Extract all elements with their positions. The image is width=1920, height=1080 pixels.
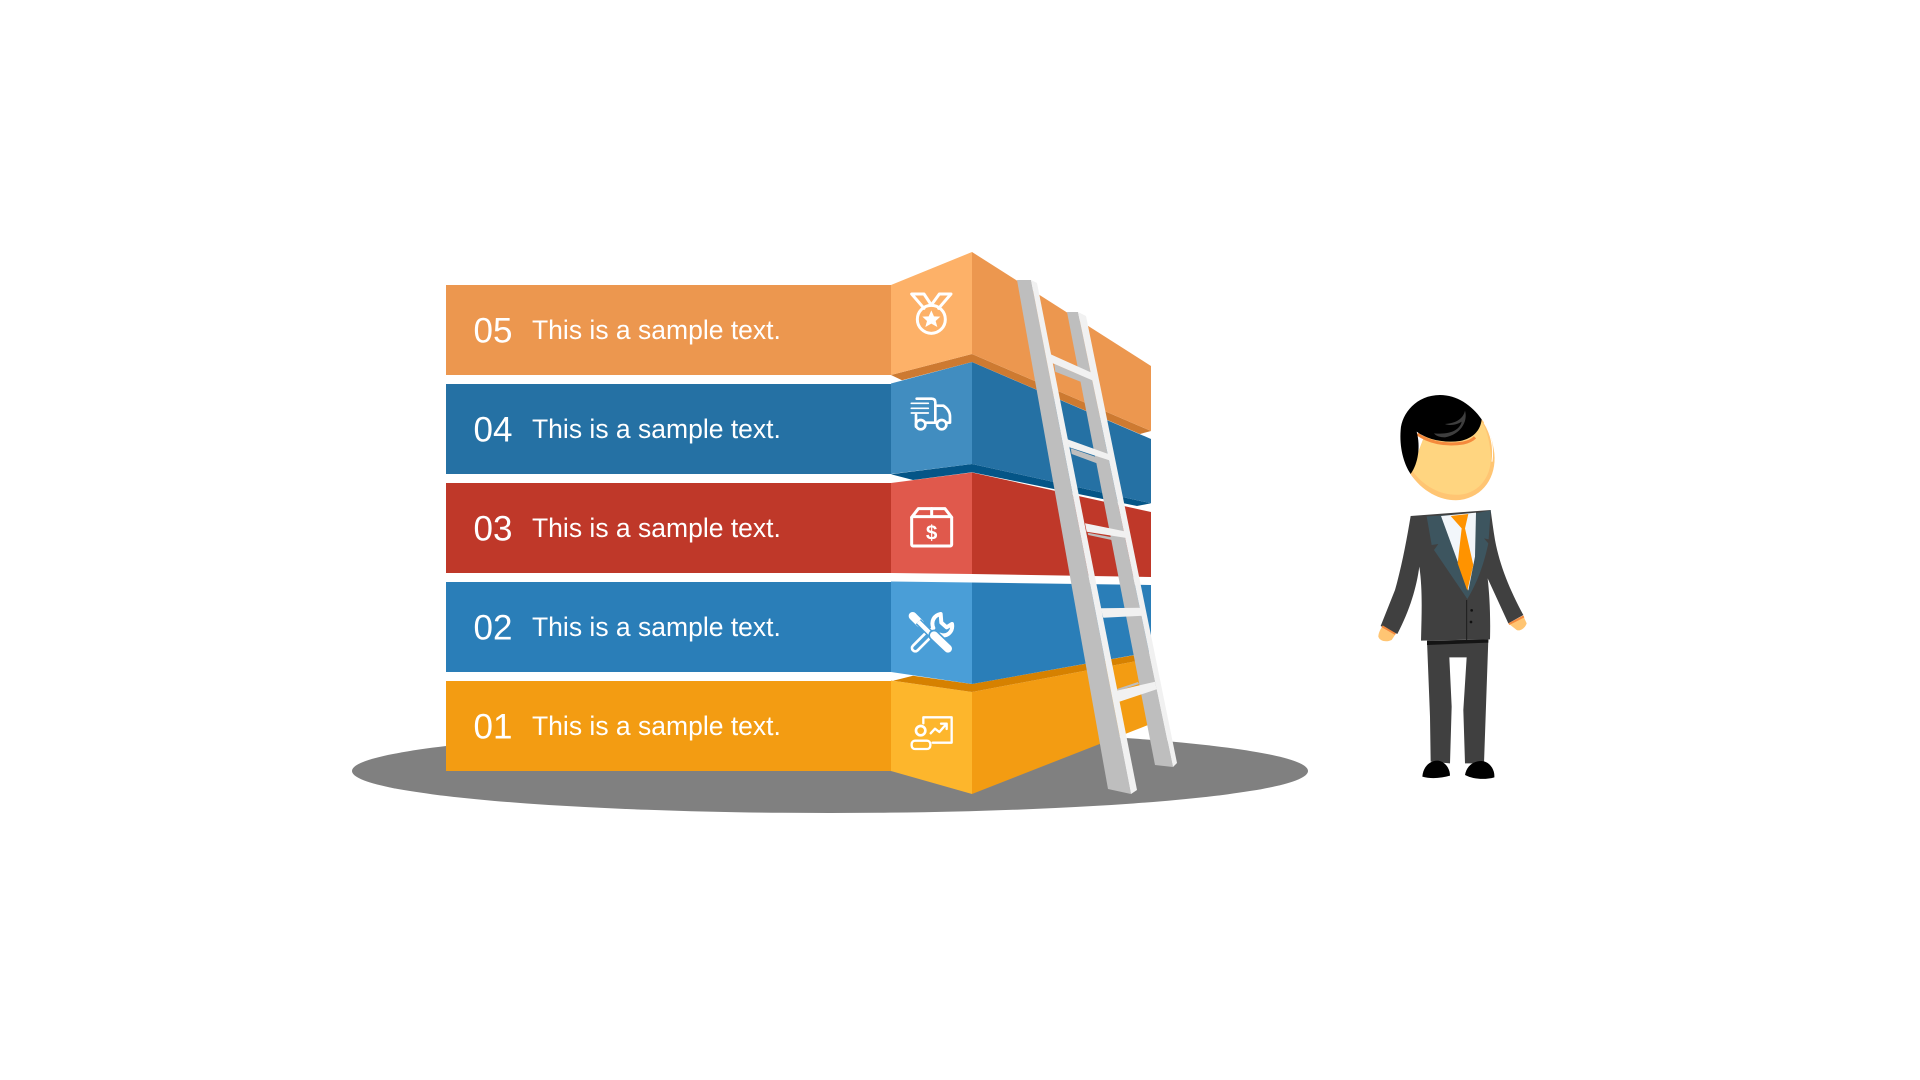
band 01 front face bbox=[891, 680, 972, 794]
band 01 bbox=[446, 661, 1148, 794]
ground shadow ellipse bbox=[352, 729, 1308, 813]
icon: dollar box: $ bbox=[926, 521, 938, 544]
band 03 bbox=[446, 472, 1151, 577]
band 03 left bar bbox=[446, 483, 892, 573]
left shoe bbox=[1422, 761, 1450, 778]
band 01 left bar bbox=[446, 681, 892, 771]
band 02 left bar bbox=[446, 582, 892, 672]
ladder left rail bbox=[1017, 280, 1137, 794]
band 02 front face bbox=[891, 582, 972, 684]
lapels bbox=[1427, 510, 1491, 599]
band 02 text: This is a sample text. bbox=[532, 612, 781, 642]
band 05 bbox=[446, 252, 1151, 434]
band 01 side face bbox=[972, 661, 1148, 794]
right shoe bbox=[1465, 761, 1494, 779]
icon: dollar box bbox=[912, 509, 952, 546]
band 02 bbox=[446, 582, 1151, 692]
band 03 number: 03 bbox=[474, 510, 512, 548]
band 05 front face bbox=[891, 252, 972, 375]
band 04 front face bbox=[891, 362, 972, 474]
ladder bbox=[1017, 280, 1177, 794]
band 04 number: 04 bbox=[474, 410, 512, 450]
trousers bbox=[1427, 639, 1488, 763]
band 05 left bar bbox=[446, 285, 892, 375]
band 05 underside shadow bbox=[891, 354, 1151, 434]
band 04 text: This is a sample text. bbox=[532, 414, 781, 444]
ladder right rail bbox=[1067, 312, 1177, 767]
band 05 number: 05 bbox=[474, 312, 512, 350]
icon: medal bbox=[912, 294, 951, 333]
band 03 text: This is a sample text. bbox=[532, 513, 781, 543]
band 05 text: This is a sample text. bbox=[532, 315, 781, 345]
shirt bbox=[1441, 513, 1476, 591]
right hand bbox=[1508, 616, 1527, 630]
head bbox=[1400, 395, 1495, 500]
band 04 side face bbox=[972, 362, 1151, 503]
band 04 underside shadow bbox=[891, 464, 1151, 506]
tie bbox=[1451, 514, 1473, 591]
belt shadow bbox=[1427, 639, 1488, 645]
band 02 underside shadow bbox=[893, 655, 1137, 692]
band 03 side face bbox=[972, 472, 1151, 577]
jacket buttons bbox=[1470, 609, 1473, 623]
jacket bbox=[1381, 510, 1523, 641]
band 01 number: 01 bbox=[474, 708, 512, 746]
ladder rungs bbox=[1050, 354, 1157, 702]
icon: delivery truck bbox=[911, 399, 950, 429]
band 01 text: This is a sample text. bbox=[532, 711, 781, 741]
band 02 number: 02 bbox=[474, 608, 512, 648]
band 03 front face bbox=[891, 472, 972, 574]
left hand bbox=[1378, 627, 1395, 641]
band 04 bbox=[446, 362, 1151, 506]
band 04 left bar bbox=[446, 384, 892, 474]
businessman figure bbox=[1378, 395, 1527, 779]
icon: presentation bbox=[912, 717, 952, 749]
cuffs bbox=[1382, 615, 1524, 635]
band 05 side face bbox=[972, 252, 1151, 431]
icon: tools bbox=[913, 614, 952, 649]
band 02 side face bbox=[972, 582, 1151, 684]
jacket centre seam bbox=[1465, 600, 1468, 640]
